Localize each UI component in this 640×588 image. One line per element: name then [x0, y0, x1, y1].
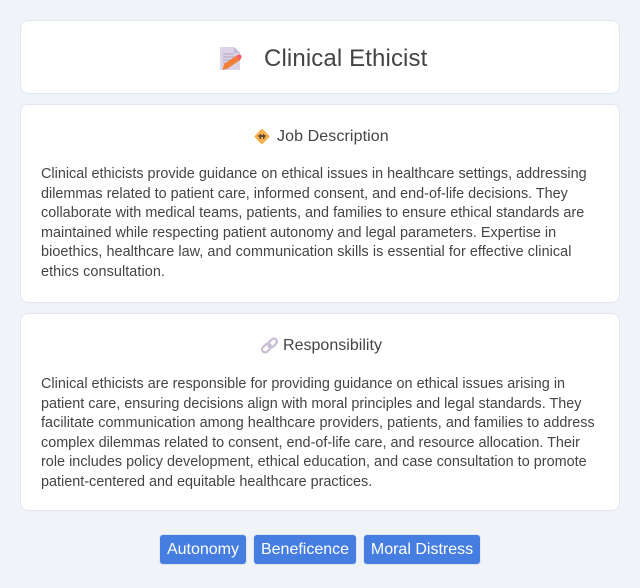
heading: responsibility: Responsibility	[283, 337, 382, 354]
text block: job description: ethics consultation.	[41, 264, 165, 280]
tag: moral distress	[364, 535, 480, 564]
icon: chain link	[261, 338, 278, 354]
text block: job description: Clinical ethicists provide guidance on ethical issues in healthcare settings, addressing	[41, 166, 587, 182]
tag row	[159, 534, 481, 565]
tag: autonomy: Autonomy	[167, 541, 239, 558]
text block: responsibility: facilitate communication among healthcare providers, patients, and families to address	[41, 415, 595, 431]
tag: beneficence	[254, 535, 356, 564]
panel: responsibility	[20, 313, 620, 511]
icon: document with pencil	[220, 47, 242, 70]
panel: job description	[20, 104, 620, 303]
tag: autonomy	[160, 535, 246, 564]
text block: responsibility	[41, 376, 595, 490]
tag: moral distress: Moral Distress	[371, 541, 473, 558]
panel: title	[20, 20, 620, 94]
text block: responsibility: Clinical ethicists are responsible for providing guidance on ethical issues arising in	[41, 376, 565, 392]
text block: responsibility: role includes policy development, ethical education, and case consultation to promote	[41, 454, 587, 470]
heading: job description: Job Description	[277, 128, 389, 145]
text block: job description: collaborate with medical teams, patients, and families to ensure ethical standards are	[41, 205, 584, 221]
icon: diamond sign	[254, 129, 270, 144]
text block: job description	[41, 166, 587, 280]
text block: responsibility: patient care, ensuring decisions align with moral principles and legal standards. They	[41, 396, 582, 412]
text block: responsibility: patient-centered and equitable healthcare practices.	[41, 474, 372, 490]
text block: job description: dilemmas related to patient care, informed consent, and end-of-life decisions. They	[41, 186, 568, 202]
title text: Clinical Ethicist	[264, 45, 427, 72]
text block: job description: maintained while respecting patient autonomy and legal parameters. Expertise in	[41, 224, 556, 240]
text block: responsibility: complex dilemmas related to consent, end-of-life care, and resource allocation. Their	[41, 434, 580, 450]
tag: beneficence: Beneficence	[261, 541, 349, 558]
text block: job description: bioethics, healthcare law, and communication skills is essential for effective clinical	[41, 244, 571, 260]
